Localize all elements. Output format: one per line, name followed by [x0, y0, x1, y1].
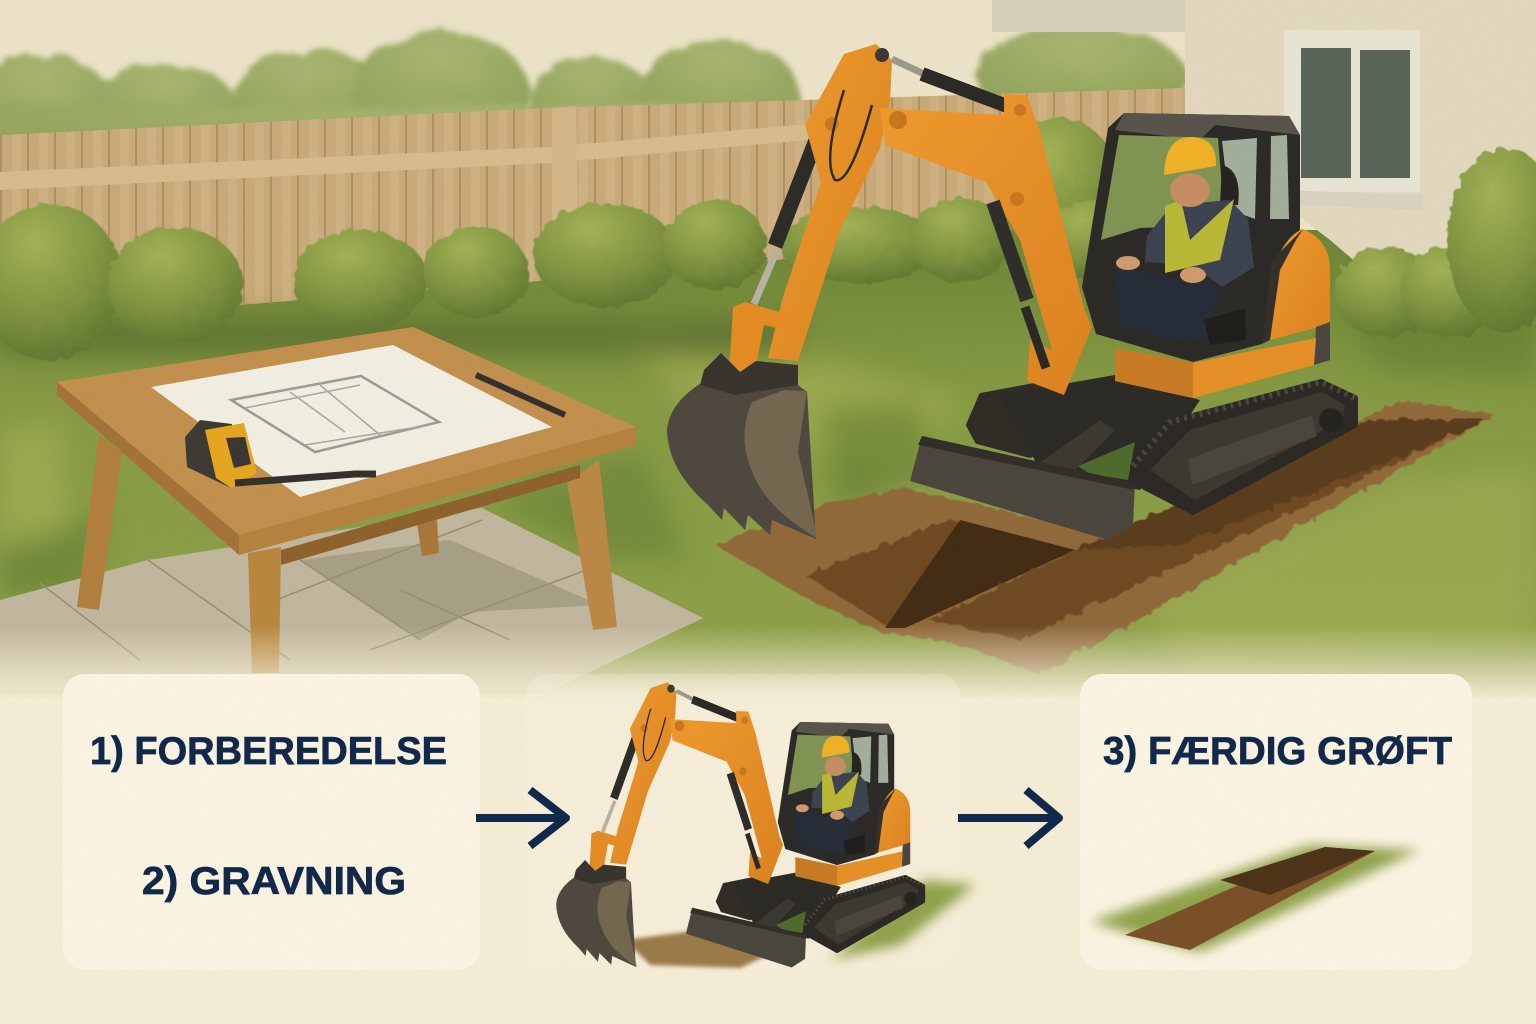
trench dirt — [715, 400, 1495, 675]
heading: step 2: 2) GRAVNING — [142, 860, 406, 903]
finished trench illustration — [1090, 845, 1420, 952]
house — [992, 0, 1536, 300]
window — [1280, 30, 1423, 210]
right shrubs — [1335, 148, 1536, 337]
lawn — [0, 230, 1536, 700]
large excavator — [667, 44, 1355, 540]
table — [57, 327, 636, 673]
blueprint paper — [151, 345, 552, 497]
dig pit — [805, 520, 1075, 628]
table apron — [281, 465, 580, 565]
arrow: step 2 to excavator — [476, 790, 566, 846]
panel: finished trench — [1080, 674, 1472, 970]
wooden fence — [0, 88, 1185, 330]
table legs — [77, 435, 122, 610]
sky background — [0, 0, 1536, 700]
long trench — [930, 420, 1485, 640]
patio — [0, 508, 703, 690]
small excavator ground — [625, 880, 975, 968]
bottom fade — [0, 625, 1536, 700]
bushes — [0, 118, 1140, 360]
lower background — [0, 700, 1536, 1024]
pencil — [235, 474, 376, 483]
hedge shadow — [0, 318, 800, 354]
pencil — [476, 375, 565, 415]
trees — [0, 25, 1185, 157]
heading: step 1: 1) FORBEREDELSE — [90, 730, 447, 773]
tape measure — [185, 420, 257, 488]
panel: steps one and two — [63, 674, 480, 970]
small excavator — [556, 682, 924, 968]
lawn shading — [0, 290, 1536, 680]
heading: step 3: 3) FÆRDIG GRØFT — [1103, 730, 1452, 773]
table top — [57, 327, 636, 535]
panel: excavator — [525, 674, 960, 970]
arrow: excavator to finished trench — [958, 790, 1059, 846]
